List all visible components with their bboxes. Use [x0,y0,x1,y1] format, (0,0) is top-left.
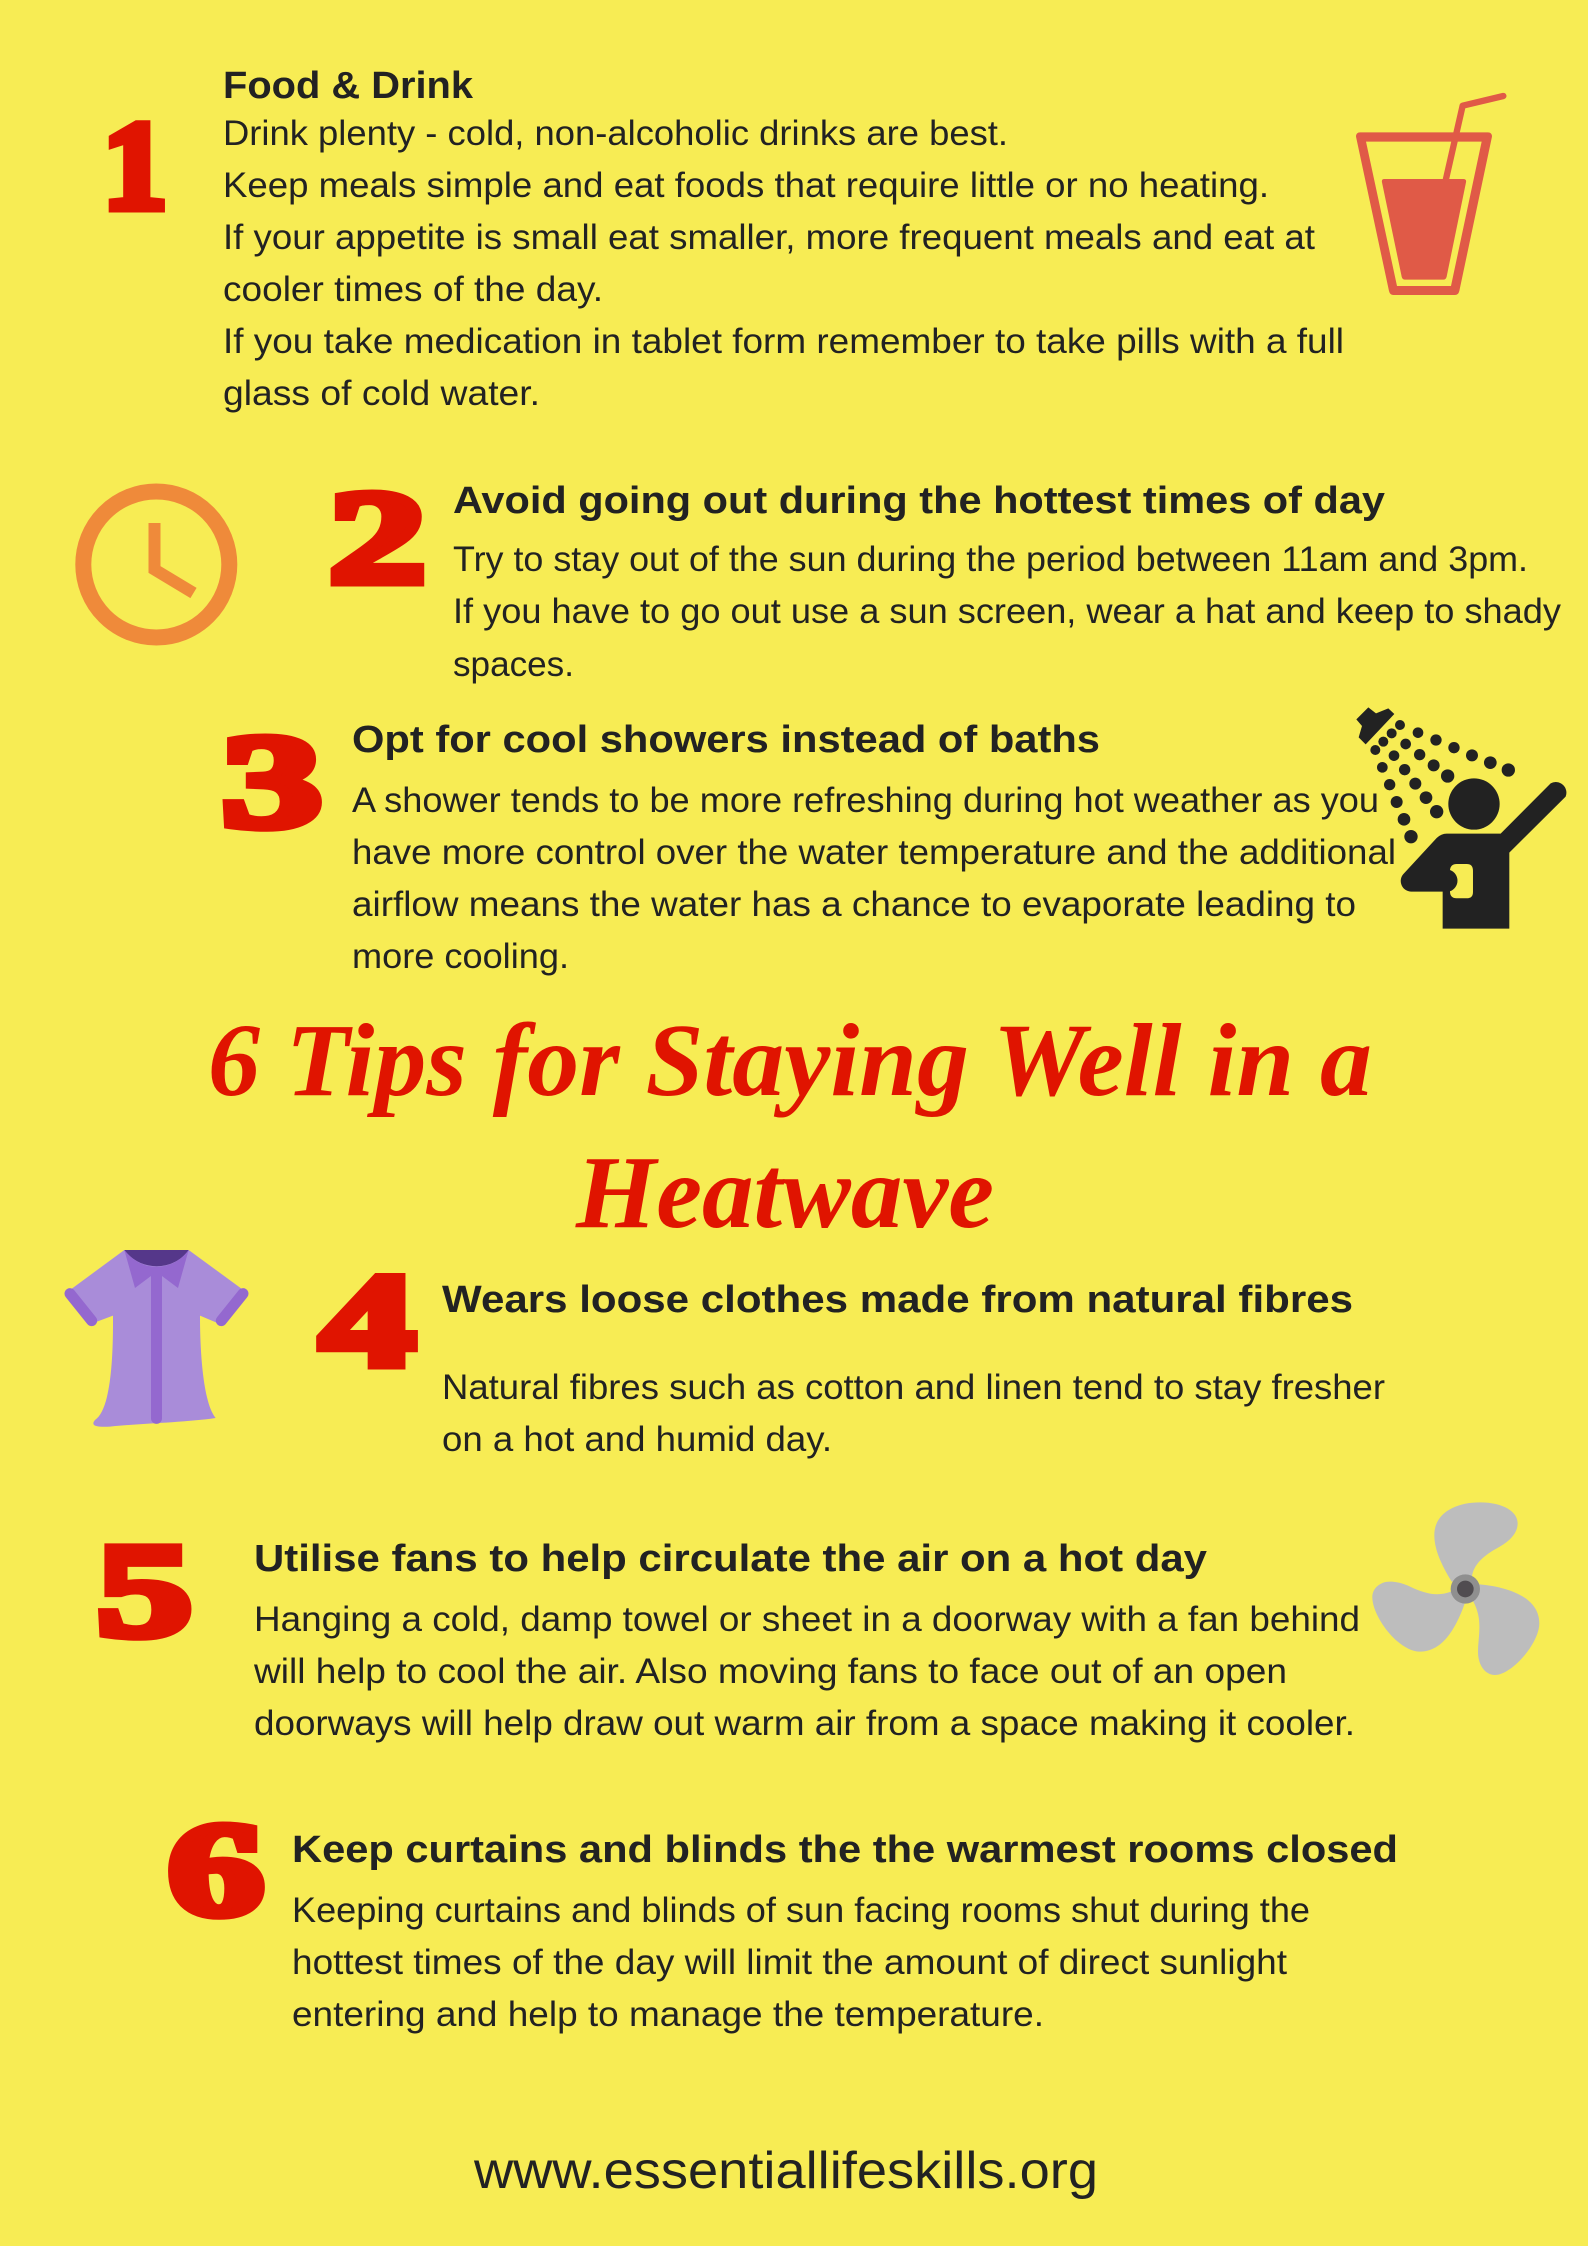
icon: fan [1372,1502,1539,1675]
body text: curtains: Keeping curtains and blinds of sun facing rooms shut during the [292,1891,1310,1930]
icon: shirt [70,1250,243,1427]
body text: fans: will help to cool the air. Also moving fans to face out of an open [253,1652,1287,1691]
heading: avoid going out: Avoid going out during the hottest times of day [453,480,1385,522]
panel: tip 3 cool showers [222,707,1566,976]
panel: tip 2 avoid going out [83,463,1562,684]
body text: food and drink: If you take medication in tablet form remember to take pills with a full [223,322,1344,361]
number 1: 1 [103,97,167,236]
body text: food and drink: glass of cold water. [223,374,540,413]
icon: person showering [1356,707,1566,929]
panel: tip 4 loose clothes [70,1246,1385,1459]
title [208,1003,1372,1250]
panel: tip 6 curtains [168,1795,1398,2034]
body text: avoid going out: spaces. [453,645,574,684]
number 2: 2 [329,463,426,611]
heading: fans: Utilise fans to help circulate the air on a hot day [254,1538,1207,1580]
heading: cool showers: Opt for cool showers instead of baths [352,719,1100,761]
body text: fans: doorways will help draw out warm air from a space making it cooler. [254,1704,1355,1743]
heading: food and drink: Food & Drink [223,65,474,107]
panel: tip 1 food and drink [103,65,1503,413]
footer: website: www.essentiallifeskills.org [473,2142,1098,2200]
heading: curtains: Keep curtains and blinds the the warmest rooms closed [292,1829,1398,1871]
body text: fans [253,1600,1360,1743]
body text: curtains: hottest times of the day will limit the amount of direct sunlight [292,1943,1287,1982]
body text: food and drink: cooler times of the day. [223,270,603,309]
body text: curtains: entering and help to manage the temperature. [292,1995,1044,2034]
heading: loose clothes: Wears loose clothes made from natural fibres [442,1279,1353,1321]
body text: avoid going out [453,540,1562,684]
body text: cool showers: more cooling. [352,937,569,976]
body text: cool showers: have more control over the water temperature and the additional [352,833,1396,872]
body text: cool showers: A shower tends to be more refreshing during hot weather as you [352,781,1379,820]
number 3: 3 [222,707,322,855]
body text: loose clothes: on a hot and humid day. [442,1420,832,1459]
body text: cool showers: airflow means the water has a chance to evaporate leading to [352,885,1356,924]
body text: food and drink: Drink plenty - cold, non-alcoholic drinks are best. [223,114,1008,153]
body text: food and drink [223,114,1344,413]
number 5: 5 [97,1516,192,1664]
number 4: 4 [320,1246,415,1394]
icon: clock [83,492,229,638]
number 6: 6 [168,1795,264,1943]
body text: avoid going out: Try to stay out of the sun during the period between 11am and 3pm. [453,540,1528,579]
title: 6 Tips for Staying Well in a [208,1003,1372,1118]
body text: loose clothes [442,1368,1385,1459]
body text: loose clothes: Natural fibres such as cotton and linen tend to stay fresher [442,1368,1385,1407]
icon: drink with straw [1356,96,1503,295]
body text: curtains [292,1891,1310,2034]
panel: tip 5 fans [97,1502,1539,1743]
title: Heatwave [575,1135,994,1250]
body text: cool showers [352,781,1396,976]
body text: avoid going out: If you have to go out use a sun screen, wear a hat and keep to shady [453,592,1562,631]
body text: fans: Hanging a cold, damp towel or sheet in a doorway with a fan behind [254,1600,1360,1639]
body text: food and drink: Keep meals simple and eat foods that require little or no heating. [223,166,1269,205]
body text: food and drink: If your appetite is small eat smaller, more frequent meals and eat at [223,218,1315,257]
